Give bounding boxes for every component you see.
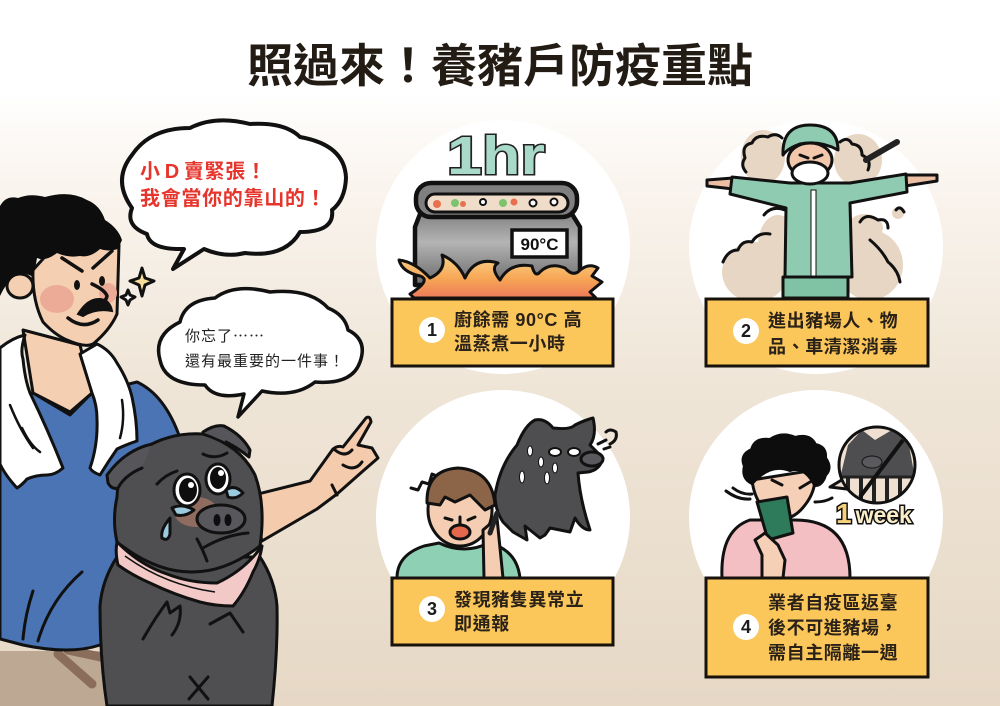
step text: 廚餘需 90°C 高 <box>454 309 582 330</box>
face <box>33 240 119 345</box>
motion lines <box>726 488 832 502</box>
mask <box>792 162 828 184</box>
step number <box>419 317 445 343</box>
shirt folds <box>23 572 82 641</box>
pig eyes <box>549 448 580 456</box>
blush <box>174 497 218 527</box>
floor shadow <box>0 651 112 706</box>
trousers <box>783 277 848 298</box>
step number: 3 <box>427 599 437 619</box>
bubble text: 還有最重要的一件事！ <box>185 350 345 371</box>
step number <box>733 614 759 640</box>
tears <box>162 488 243 539</box>
panel 1: boil food waste <box>376 120 630 374</box>
shirt <box>397 543 520 578</box>
scarf folds <box>125 556 215 592</box>
face <box>752 470 815 518</box>
hands <box>143 602 243 639</box>
label box <box>706 299 928 366</box>
panel 4: isolation one week <box>689 390 943 677</box>
pig snout <box>581 452 603 466</box>
flames <box>399 255 602 298</box>
puff <box>598 430 616 449</box>
eyebrows, nose and mouth <box>62 251 112 325</box>
title: 照過來！養豬戶防疫重點 <box>247 40 753 92</box>
panel 2: disinfection <box>689 120 943 374</box>
pointing arm <box>250 417 378 541</box>
step text: 後不可進豬場， <box>768 618 898 638</box>
temperature tag: 90°C <box>521 235 558 254</box>
ear <box>7 274 33 298</box>
temperature tag <box>512 230 567 257</box>
shirt <box>0 382 190 650</box>
moustache <box>78 299 112 316</box>
protective suit <box>730 174 907 277</box>
left ear <box>107 444 152 488</box>
cloud outlines <box>723 135 904 282</box>
1hr label: 1hr <box>447 126 545 186</box>
white circle <box>376 390 630 644</box>
step text: 溫蒸煮一小時 <box>454 334 566 354</box>
man's legs <box>58 650 105 684</box>
disinfectant clouds <box>722 130 904 302</box>
eyes <box>772 480 810 488</box>
towel left <box>0 335 63 488</box>
pink scarf <box>116 542 262 606</box>
bubble text: 你忘了…… <box>185 325 265 346</box>
label box <box>392 299 613 366</box>
sparkles <box>130 268 154 296</box>
white circle <box>689 120 943 374</box>
snout <box>197 505 245 533</box>
sick pig <box>495 418 616 540</box>
right eye <box>206 464 230 494</box>
right ear <box>203 426 250 457</box>
white circle <box>376 120 630 374</box>
stress mark <box>411 474 437 490</box>
label box <box>392 578 613 645</box>
hood <box>783 125 838 155</box>
zip <box>811 190 816 277</box>
white circle <box>689 390 943 644</box>
step text: 需自主隔離一週 <box>768 642 898 663</box>
nostrils <box>214 514 232 526</box>
step text: 業者自疫區返臺 <box>768 592 898 613</box>
head <box>428 474 492 546</box>
curly hair <box>744 435 828 485</box>
brows and mouth <box>157 453 248 561</box>
character: man with towel <box>0 194 190 706</box>
bubble text: 我會當你的靠山的！ <box>140 186 326 210</box>
hose <box>866 142 897 160</box>
pot body <box>415 214 580 285</box>
mouth <box>450 525 470 539</box>
speech bubble: forgot something <box>159 289 362 417</box>
head <box>114 434 262 572</box>
eyes <box>800 155 822 158</box>
step text: 發現豬隻異常立 <box>454 589 584 610</box>
step text: 進出豬場人、物 <box>768 311 898 331</box>
blush <box>40 283 117 313</box>
step text: 品、車清潔消毒 <box>768 337 898 357</box>
speech bubble: red reassurance <box>122 120 346 269</box>
bubble text: 小 <box>140 160 161 183</box>
belly x mark <box>189 677 208 699</box>
passport <box>757 497 793 540</box>
shirt <box>722 520 850 578</box>
sparkle small <box>121 290 135 305</box>
towel folds <box>10 400 123 452</box>
left eye <box>174 474 200 506</box>
soup contents <box>426 194 568 212</box>
face <box>788 143 832 177</box>
hands <box>707 175 937 189</box>
hand <box>755 533 785 578</box>
1 week label: 1week <box>836 498 912 529</box>
towel right <box>80 344 137 475</box>
pot rim <box>416 183 577 217</box>
bubble text: D賣緊張！ <box>165 161 267 183</box>
phone <box>490 513 497 533</box>
step number: 2 <box>741 321 751 341</box>
panel 3: report abnormal pigs <box>376 390 630 645</box>
neck <box>23 330 92 412</box>
arm <box>483 518 503 578</box>
step text: 即通報 <box>454 614 510 634</box>
step number <box>733 318 759 344</box>
step number <box>419 596 445 622</box>
thought bubble with crossed out pig <box>830 427 916 505</box>
character: crying pig <box>100 426 277 706</box>
sweat drops <box>520 446 558 484</box>
hair <box>0 194 122 296</box>
label box <box>706 578 928 677</box>
finger lines <box>332 450 362 495</box>
hair <box>427 468 495 510</box>
eyes and nose <box>445 517 475 525</box>
step number: 4 <box>741 617 751 637</box>
step number: 1 <box>427 320 437 340</box>
body <box>100 557 277 706</box>
eyes <box>74 276 105 290</box>
